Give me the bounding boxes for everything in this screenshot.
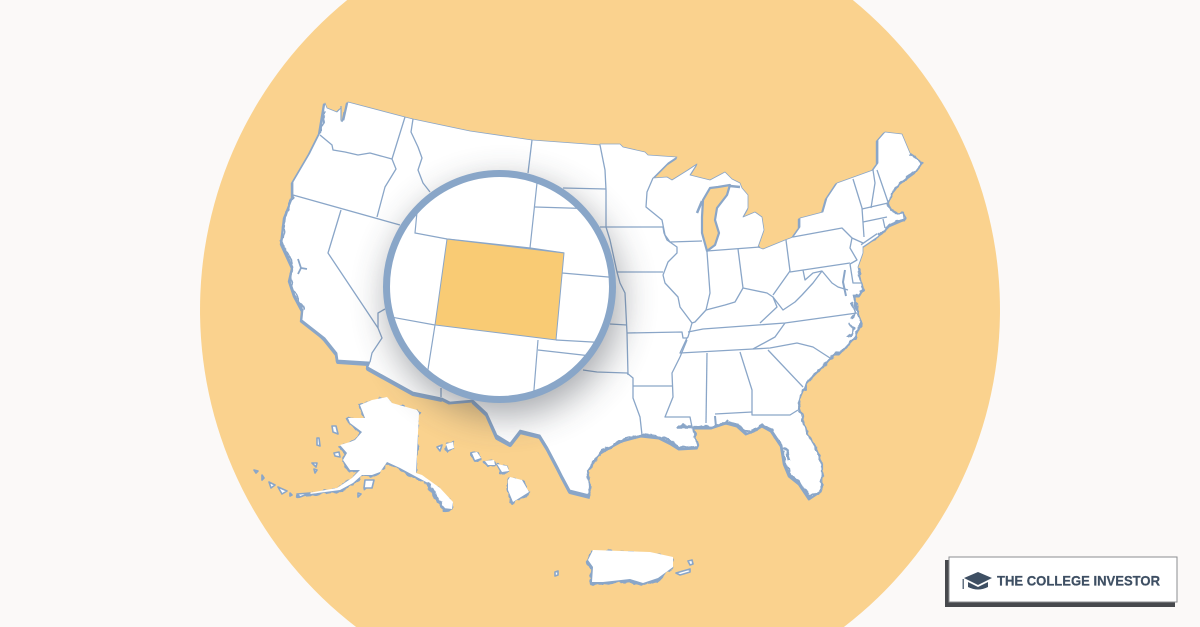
magnifying lens	[380, 174, 621, 420]
alaska panhandle islands	[428, 483, 443, 508]
alaska	[296, 397, 453, 510]
rough pacific coast	[282, 110, 325, 310]
hawaii	[446, 442, 529, 503]
coastal detail	[298, 106, 878, 460]
lens ring	[386, 174, 612, 400]
lens face	[386, 174, 612, 400]
icon: graduation cap	[963, 572, 992, 590]
orange backdrop circle	[200, 0, 1000, 627]
state borders	[293, 117, 888, 435]
badge shadow	[945, 560, 1175, 607]
badge box	[949, 557, 1177, 602]
lens shadow	[387, 182, 621, 416]
map of the United States	[254, 102, 922, 584]
lake michigan	[702, 185, 730, 251]
contiguous states outline	[281, 102, 922, 500]
rough eastern and gulf coast	[588, 153, 922, 498]
kodiak and nearby islands	[364, 482, 373, 488]
logo badge	[945, 557, 1177, 607]
brand name: THE COLLEGE INVESTOR	[997, 572, 1160, 588]
magnified state borders	[394, 184, 609, 390]
colorado	[435, 239, 564, 340]
puerto rico	[587, 550, 673, 584]
small islands	[254, 426, 693, 576]
thick southwest coast	[303, 318, 590, 497]
